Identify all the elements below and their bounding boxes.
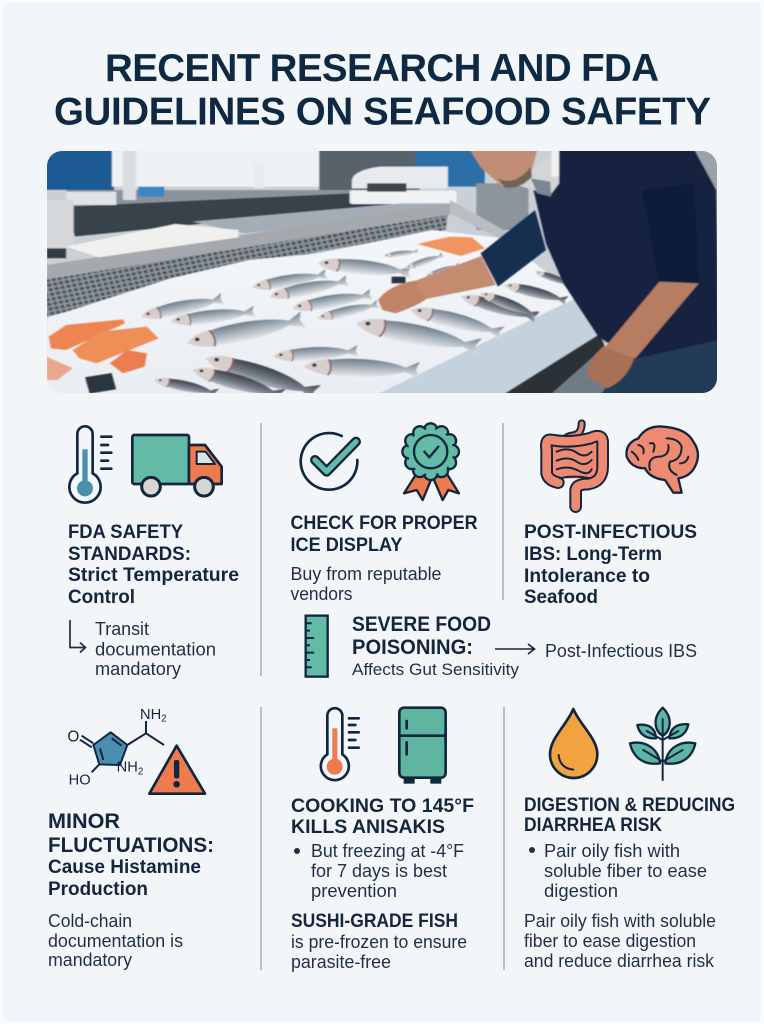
panel: post-infectious IBS: IBS: Long-Term — [524, 543, 662, 565]
panel: digestion and reducing diarrhea risk: Pair oily fish with — [544, 841, 680, 861]
bullet — [294, 848, 300, 854]
panel: check for proper ice display — [290, 512, 478, 604]
panel: cooking to 145F: is pre-frozen to ensure — [291, 932, 467, 952]
grille — [47, 215, 448, 317]
title — [54, 47, 711, 134]
icon: thermometer cold — [69, 426, 111, 503]
icon: oil drop — [550, 709, 597, 778]
icon: histamine molecule: NH — [117, 760, 138, 776]
panel: FDA safety standards: Control — [68, 586, 135, 608]
icon: histamine molecule: 2 — [161, 714, 167, 725]
fish — [141, 293, 224, 320]
icon: ruler — [306, 616, 328, 677]
panel: FDA safety standards — [68, 521, 239, 679]
panel: post-infectious IBS: Intolerance to — [524, 565, 650, 587]
title: GUIDELINES ON SEAFOOD SAFETY — [54, 90, 711, 134]
ice bed — [47, 230, 579, 395]
panel: minor fluctuations: Cold-chain — [48, 911, 132, 931]
panel: cooking to 145F: KILLS ANISAKIS — [291, 816, 445, 838]
sweater — [531, 150, 718, 359]
left scale — [47, 200, 74, 248]
neck and face — [519, 157, 560, 194]
icon: histamine molecule: O — [67, 729, 79, 746]
panel: check for proper ice display: CHECK FOR PROPER — [290, 512, 478, 534]
panel: severe food poisoning — [352, 613, 697, 679]
icon: refrigerator — [399, 708, 446, 782]
panel: digestion and reducing diarrhea risk: DIARRHEA RISK — [524, 814, 662, 836]
jeans — [601, 337, 718, 395]
panel: minor fluctuations: documentation is — [48, 931, 183, 951]
panel: minor fluctuations: mandatory — [48, 950, 133, 970]
panel: FDA safety standards: STANDARDS: — [68, 543, 191, 565]
panel: minor fluctuations: Cause Histamine — [48, 856, 201, 878]
panel: FDA safety standards: FDA SAFETY — [68, 521, 183, 543]
panel: minor fluctuations: FLUCTUATIONS: — [48, 834, 214, 857]
panel: post-infectious IBS: POST-INFECTIOUS — [524, 521, 697, 543]
icon: histamine molecule: NH — [140, 707, 161, 723]
panel: post-infectious IBS: Seafood — [524, 586, 598, 608]
near forearm — [413, 256, 496, 299]
icon: histamine molecule — [67, 707, 167, 788]
icon: brain — [626, 426, 698, 493]
panel: cooking to 145F: prevention — [311, 881, 397, 901]
icon: histamine molecule: 2 — [138, 766, 144, 777]
panel: digestion and reducing diarrhea risk — [524, 794, 735, 971]
icon: warning triangle — [149, 746, 205, 794]
panel: FDA safety standards: documentation — [95, 640, 216, 660]
icon: delivery truck — [132, 435, 222, 496]
title: RECENT RESEARCH AND FDA — [105, 47, 659, 90]
icon: check mark in circle — [301, 433, 357, 490]
panel: digestion and reducing diarrhea risk: soluble fiber to ease — [544, 861, 707, 881]
panel: minor fluctuations: MINOR — [48, 810, 120, 833]
panel: minor fluctuations — [48, 810, 214, 970]
icon: thermometer hot — [321, 708, 359, 780]
panel: digestion and reducing diarrhea risk: Pair oily fish with soluble — [524, 911, 716, 931]
panel: FDA safety standards: Transit — [95, 619, 149, 639]
panel: cooking to 145F: But freezing at -4°F — [311, 841, 464, 861]
panel: check for proper ice display: Buy from reputable — [290, 564, 442, 584]
panel: FDA safety standards: mandatory — [95, 659, 182, 679]
near arm sweater — [481, 210, 546, 287]
icon: histamine molecule: HO — [69, 772, 91, 788]
panel: cooking to 145F: for 7 days is best — [311, 861, 447, 881]
arrow: elbow to transit note — [70, 620, 86, 652]
photo: man inspecting fish on ice at seafood counter — [40, 150, 724, 402]
icon: award ribbon badge — [402, 423, 459, 500]
panel: check for proper ice display: ICE DISPLAY — [290, 534, 402, 556]
panel: FDA safety standards: Strict Temperature — [68, 564, 239, 586]
icon: intestines — [546, 423, 603, 507]
panel: digestion and reducing diarrhea risk: DIGESTION & REDUCING — [524, 794, 735, 816]
counter top — [193, 203, 450, 233]
panel: digestion and reducing diarrhea risk: and reduce diarrhea risk — [524, 951, 715, 971]
panel: digestion and reducing diarrhea risk: digestion — [544, 881, 618, 901]
arrow: to post-infectious IBS — [495, 644, 534, 654]
panel: severe food poisoning: POISONING: — [352, 636, 473, 659]
panel: cooking to 145F — [291, 795, 474, 972]
panel: cooking to 145F: SUSHI-GRADE FISH — [291, 911, 458, 932]
cutting board — [66, 224, 238, 257]
panel: cooking to 145F: COOKING TO 145°F — [291, 795, 474, 817]
panel: post-infectious IBS — [524, 521, 697, 608]
panel: severe food poisoning: Affects Gut Sensitivity — [352, 660, 520, 679]
panel: cooking to 145F: parasite-free — [291, 952, 391, 972]
panel: digestion and reducing diarrhea risk: fiber to ease digestion — [524, 931, 696, 951]
icon: plant leaves — [630, 708, 695, 780]
salmon — [49, 319, 125, 350]
scale on counter — [352, 167, 448, 188]
panel: minor fluctuations: Production — [48, 878, 148, 900]
glass front — [376, 298, 601, 395]
bullet — [529, 847, 535, 853]
panel: check for proper ice display: vendors — [290, 584, 352, 604]
panel: severe food poisoning: SEVERE FOOD — [352, 613, 491, 636]
far arm skin — [603, 282, 699, 358]
panel: severe food poisoning: Post-Infectious IBS — [545, 641, 697, 661]
